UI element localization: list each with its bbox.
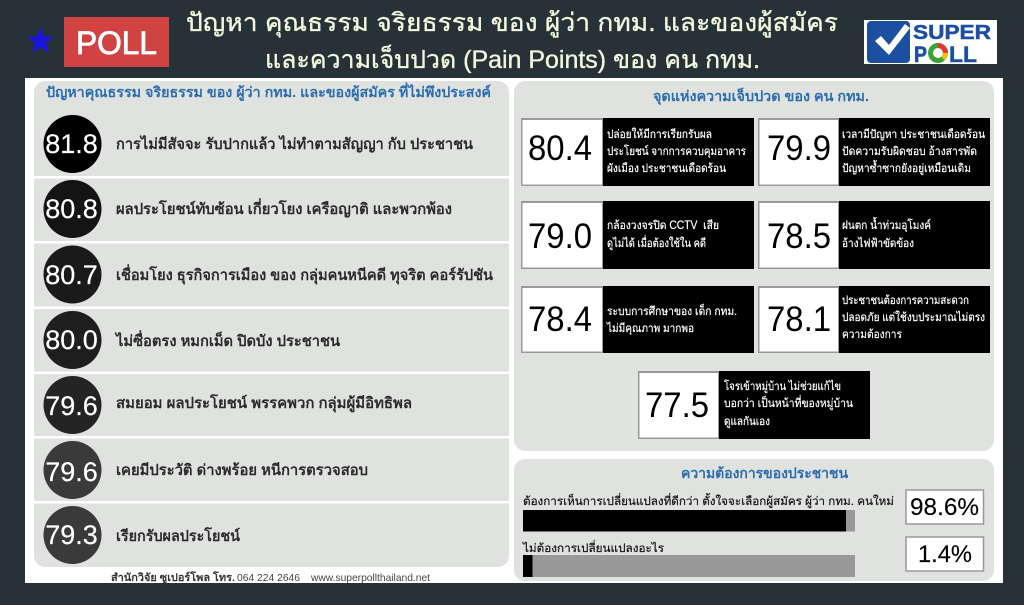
row 6: 79.6 [45, 457, 98, 487]
icon: blue star [27, 27, 54, 53]
card 77.5: บอกว่า เป็นหน้าที่ของหมู่บ้าน [724, 395, 853, 410]
card 77.5 [638, 371, 870, 439]
card 79.9: เวลามีปัญหา ประชาชนเดือดร้อน [842, 128, 985, 141]
panel heading: ปัญหาคุณธรรม จริยธรรม ของ ผู้ว่า กทม. และของผู้สมัคร ที่ไม่พึงประสงค์ [46, 82, 491, 101]
card 78.5: อ้างไฟฟ้าขัดข้อง [842, 237, 914, 250]
row 4: ไม่ซื่อตรง หมกเม็ด ปิดบัง ประชาชน [114, 330, 341, 350]
row 2: 80.8 [45, 194, 98, 224]
row 2 [44, 180, 452, 238]
card 79.9: ปัญหาซ้ำซากยังอยู่เหมือนเดิม [842, 160, 971, 175]
row 3: เชื่อมโยง ธุรกิจการเมือง ของ กลุ่มคนหนีคดี ทุจริต คอร์รัปชัน [116, 264, 494, 285]
card 80.4: ปล่อยให้มีการเรียกรับผล [607, 128, 712, 141]
row 1: การไม่มีสัจจะ รับปากแล้ว ไม่ทำตามสัญญา กับ ประชาชน [116, 134, 474, 153]
card 78.5: 78.5 [767, 217, 831, 256]
row 5: สมยอม ผลประโยชน์ พรรคพวก กลุ่มผู้มีอิทธิพล [116, 393, 412, 413]
card 78.1 [758, 286, 990, 353]
card 80.4 [521, 118, 754, 186]
title: ปัญหา คุณธรรม จริยธรรม ของ ผู้ว่า กทม. และของผู้สมัคร [186, 9, 838, 38]
card 78.5: ฝนตก น้ำท่วมอุโมงค์ [842, 217, 931, 232]
row 2: ผลประโยชน์ทับซ้อน เกี่ยวโยง เครือญาติ และพวกพ้อง [116, 198, 452, 218]
card 79.9 [758, 118, 990, 186]
row 6: เคยมีประวัติ ด่างพร้อย หนีการตรวจสอบ [116, 461, 368, 479]
card 79.9: 79.9 [767, 129, 831, 168]
row 7: เรียกรับผลประโยชน์ [116, 526, 241, 545]
card 77.5: 77.5 [645, 386, 709, 425]
logo: Super Poll [864, 20, 997, 67]
value 1.4%: 1.4% [918, 541, 972, 568]
card 78.1: ปลอดภัย แต่ใช้งบประมาณไม่ตรง [842, 311, 985, 324]
card 78.1: ความต้องการ [842, 328, 902, 341]
panel heading: ความต้องการของประชาชน [681, 465, 848, 481]
row 4 [44, 311, 341, 369]
panel: public wants [514, 459, 994, 581]
bar: want change [523, 493, 894, 532]
value 1.4% [906, 537, 984, 571]
logo: Super Poll: SUPER [913, 22, 992, 44]
card 79.9: ปัดความรับผิดชอบ อ้างสารพัด [842, 145, 977, 158]
card 79.0 [521, 201, 754, 269]
card 78.4: ไม่มีคุณภาพ มากพอ [606, 322, 694, 335]
row 3 [44, 246, 494, 304]
bar: no change: ไม่ต้องการเปลี่ยนแปลงอะไร [522, 540, 664, 555]
panel: ethics problems [34, 81, 509, 567]
badge: POLL [64, 17, 169, 67]
card 79.0: ดูไม่ได้ เมื่อต้องใช้ใน คดี [607, 235, 706, 250]
title: และความเจ็บปวด (Pain Points) ของ คน กทม. [265, 44, 760, 74]
row 1 [44, 115, 474, 173]
logo: Super Poll: LL [949, 42, 977, 67]
footer credit [111, 571, 430, 585]
value 98.6%: 98.6% [910, 494, 979, 521]
row 6 [44, 441, 368, 499]
card 80.4: ผังเมือง ประชาชนเดือดร้อน [607, 162, 726, 175]
card 78.4: ระบบการศึกษาของ เด็ก กทม. [607, 303, 737, 318]
badge: POLL: POLL [76, 25, 157, 61]
card 78.4: 78.4 [528, 300, 592, 339]
row 1: 81.8 [45, 129, 98, 159]
bar: no change [522, 540, 855, 577]
card 78.1: ประชาชนต้องการความสะดวก [842, 294, 969, 307]
title [186, 9, 838, 74]
footer credit: สำนักวิจัย ซูเปอร์โพล โทร. [111, 571, 235, 585]
row 5: 79.6 [45, 391, 98, 421]
row 4: 80.0 [45, 325, 98, 355]
card 80.4: 80.4 [528, 129, 592, 168]
card 77.5: โจรเข้าหมู่บ้าน ไม่ช่วยแก้ไข [724, 379, 841, 393]
footer credit: www.superpollthailand.net [310, 572, 430, 584]
panel heading: จุดแห่งความเจ็บปวด ของ คน กทม. [653, 87, 869, 105]
row 5 [44, 376, 412, 434]
card 79.0: 79.0 [528, 217, 592, 256]
card 80.4: ประโยชน์ จากการควบคุมอาคาร [607, 144, 746, 158]
row 7 [44, 506, 241, 564]
row 7: 79.3 [45, 520, 98, 550]
card 78.5 [758, 201, 990, 269]
card 78.1: 78.1 [767, 300, 831, 339]
row 3: 80.7 [45, 260, 98, 290]
card 77.5: ดูแลกันเอง [724, 416, 770, 428]
footer credit: 064 224 2646 [237, 572, 300, 584]
card 78.4 [521, 286, 754, 353]
logo: Super Poll: P [914, 42, 927, 67]
card 79.0: กล้องวงจรปิด CCTV เสีย [607, 219, 719, 232]
white content sheet [25, 78, 1003, 583]
panel: pain points [514, 81, 994, 451]
bar: want change: ต้องการเห็นการเปลี่ยนแปลงที่ดีกว่า ตั้งใจจะเลือกผู้สมัคร ผู้ว่า กทม. คนใหม่ [523, 493, 894, 508]
